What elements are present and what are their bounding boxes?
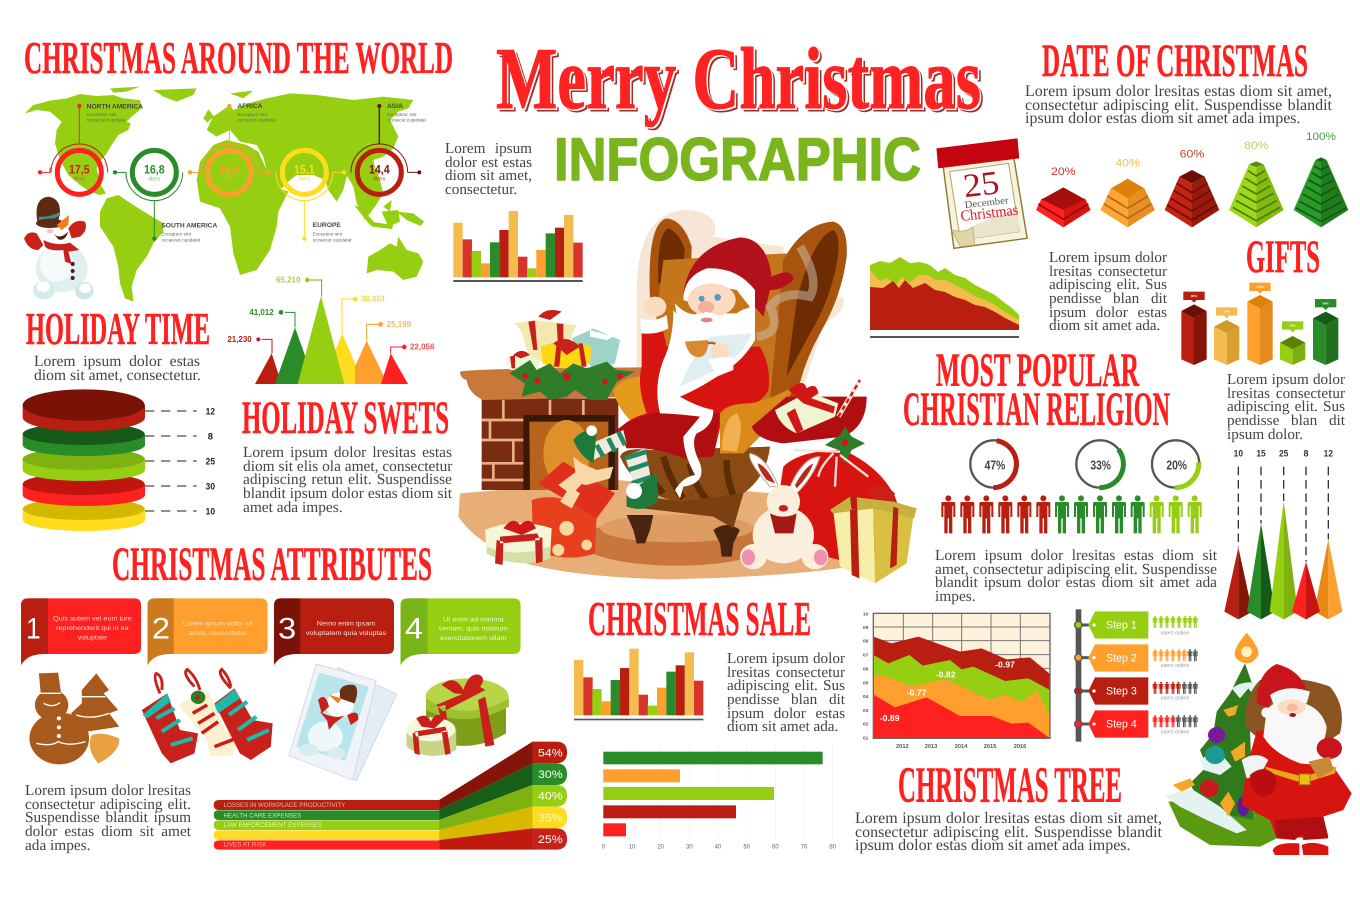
peak chart: holiday time values — [227, 276, 435, 384]
funnel chart: cost categories: LOSSES IN WORKPLACE PRODUCTIVITY — [224, 802, 346, 809]
world map with five litre rings: NORTH AMERICA — [87, 103, 143, 110]
card 3: Nemo enim ipsam — [317, 621, 376, 628]
area chart: yearly values: 2015 — [984, 744, 996, 750]
step 1: Step 1 — [1106, 620, 1137, 632]
illustration: santa with christmas tree — [1165, 633, 1352, 855]
world map with five litre rings: Excepteur sint — [387, 112, 417, 117]
title: merry christmas: Merry Christmas — [499, 34, 984, 131]
card 1: voluptate — [78, 635, 107, 641]
area chart: yearly values: 02 — [863, 722, 869, 728]
area chart: yearly values: 04 — [863, 694, 869, 700]
text block: beside gifts: lresitas consectetur — [1049, 263, 1167, 280]
isometric bar chart: gifts: 100% — [1256, 285, 1264, 289]
horizontal bar chart: 20 — [657, 845, 665, 851]
text block: gifts: pendisse blan dit — [1227, 412, 1345, 429]
bar chart: top centre — [453, 211, 583, 282]
funnel chart: cost categories: 35% — [538, 811, 563, 824]
world map with five litre rings: EUROPE — [313, 222, 341, 229]
icon: gingerbread cookies — [29, 673, 120, 764]
world map with five litre rings: occaecat cupidatat — [313, 238, 352, 243]
text block: christmas tree — [855, 810, 1162, 854]
area chart: yearly values: 05 — [863, 680, 869, 686]
sack with gift and holly — [752, 380, 910, 560]
text block: date of christmas: consectetur adipiscing elit. Suspendisse blandit — [1025, 97, 1332, 114]
area chart: yearly values: 2013 — [925, 744, 937, 750]
step 2: Step 2 — [1106, 652, 1137, 664]
heading: christmas around the world: CHRISTMAS AROUND THE WORLD — [24, 32, 453, 83]
spike chart: right column: 15 — [1256, 449, 1266, 459]
area chart: yearly values: 06 — [863, 666, 869, 672]
card 2: 2 — [152, 612, 170, 645]
card 3: voluptatem quia voluptas — [306, 630, 387, 637]
card 2: amet, consectetur — [189, 630, 247, 637]
horizontal bar chart: 0 — [602, 845, 606, 851]
peak chart: holiday time values: 41,012 — [249, 308, 274, 317]
donut charts and people row — [941, 440, 1202, 533]
peak chart: holiday time values: 21,230 — [227, 335, 252, 344]
step 4: users online — [1161, 729, 1189, 735]
area chart: yearly values: -0.77 — [907, 688, 927, 698]
text block: holiday swets: blandit ipsum dolor estas diom sit — [243, 485, 452, 502]
text block: holiday swets: adipiscing retun elit. Suspendisse — [243, 471, 452, 488]
spike chart: right column: 8 — [1303, 449, 1308, 459]
step 4 — [1075, 710, 1198, 738]
text block: most popular religion: blandit ipsum dolor estas diom sit amet ada — [935, 574, 1217, 591]
text block: gifts: Lorem ipsum dolor — [1227, 371, 1345, 388]
gold gift box — [830, 486, 917, 583]
bar chart: christmas sale — [574, 649, 703, 720]
floor gifts — [485, 457, 615, 565]
text block: gifts: lresitas consectetur — [1227, 385, 1345, 402]
horizontal bar chart: 70 — [801, 845, 808, 851]
text block: christmas sale — [727, 650, 845, 735]
area chart: yearly values: -0.97 — [995, 660, 1015, 670]
heading: holiday time: HOLIDAY TIME — [26, 303, 210, 354]
calendar: 25 december christmas: 25 — [961, 164, 1001, 205]
area chart: yearly values: 2016 — [1014, 744, 1026, 750]
card 3 — [274, 598, 394, 665]
text block: christmas sale: pendisse blan dit — [727, 691, 845, 708]
text block: christmas sale: ipsum dolor estas — [727, 705, 845, 722]
ring: europe 15,1: litres — [298, 177, 310, 183]
card 1: Quis autem vel eum iure — [53, 616, 132, 623]
area chart: top right — [870, 257, 1019, 338]
area chart: yearly values: 08 — [863, 639, 869, 645]
funnel chart: cost categories: LIVES AT RISK — [224, 842, 267, 849]
card 4 — [401, 598, 521, 665]
text block: date of christmas — [1025, 83, 1332, 127]
bunny toy — [740, 453, 828, 569]
title: merry christmas: Merry Christmas — [496, 31, 981, 128]
text block: gifts: adipiscing elit. Sus — [1227, 398, 1345, 415]
area chart: yearly values: 2012 — [896, 744, 909, 750]
area chart: yearly values: -0.82 — [936, 670, 956, 680]
world map with five litre rings: occaecat cupidatat — [161, 238, 201, 243]
area chart: yearly values: 2014 — [955, 744, 968, 750]
text block: date of christmas: Lorem ipsum dolor lresitas estas diom sit amet, — [1025, 83, 1332, 100]
armchair — [613, 218, 847, 557]
isometric bar chart: gifts: 60% — [1323, 301, 1329, 305]
text block: beside gifts: Lorem ipsum dolor — [1049, 249, 1167, 266]
heading: most popular christian religion — [903, 344, 1170, 436]
mantel gifts and holly — [505, 310, 635, 400]
card 4: 4 — [405, 612, 423, 645]
text block: top centre: dolor est estas — [445, 154, 532, 171]
stacked discs chart: 8 — [208, 431, 213, 441]
isometric bar chart: gifts: 25% — [1290, 324, 1296, 328]
text block: holiday time — [34, 353, 201, 384]
text block: beside gifts: ipsum dolor estas — [1049, 304, 1167, 321]
world map with five litre rings: Excepteur sint — [161, 232, 192, 237]
area chart: yearly values: 03 — [863, 708, 869, 714]
funnel chart: cost categories: 40% — [538, 789, 563, 803]
artwork layer with all headings, charts and illustrations: CHRISTMAS TREE — [898, 758, 1122, 814]
calendar: 25 december christmas: December — [964, 195, 1010, 211]
ring: north america 17,5: 17,5 — [69, 163, 90, 177]
text block: most popular religion: impes. — [935, 588, 976, 605]
calendar: 25 december christmas: Christmas — [960, 202, 1019, 225]
ring: asia 14,4: 14,4 — [369, 163, 390, 177]
pyramid chart: 20 to 100 percent: 40% — [1115, 157, 1140, 169]
text block: beside gifts: adipiscing elit. Sus — [1049, 276, 1167, 293]
text block: beside gifts: diom sit amet ada. — [1049, 317, 1160, 334]
world map with five litre rings: occaecat cupidatat — [237, 118, 277, 123]
text block: christmas attributes: consectetur adipiscing elit. — [25, 796, 191, 813]
donut charts and people row: 33% — [1090, 458, 1111, 472]
pyramid chart: 20 to 100 percent: 100% — [1306, 131, 1336, 143]
world map with five litre rings: ASIA — [387, 103, 403, 110]
pyramid chart: 20 to 100 percent: 60% — [1180, 149, 1204, 161]
area chart: yearly values: 01 — [863, 735, 869, 741]
text block: christmas sale: diom sit amet ada. — [727, 718, 838, 735]
peak chart: holiday time values: 38,601 — [361, 295, 386, 304]
world map with five litre rings: SOUTH AMERICA — [161, 223, 217, 230]
heading: holiday swets: HOLIDAY SWETS — [242, 392, 449, 444]
step 3: Step 3 — [1106, 686, 1137, 698]
stacked discs chart: 10 — [206, 506, 215, 516]
horizontal bar chart — [602, 743, 837, 851]
ring: europe 15,1: 15,1 — [294, 163, 315, 177]
horizontal bar chart: 10 — [629, 845, 636, 851]
horizontal bar chart: 30 — [686, 845, 693, 851]
horizontal bar chart: 80 — [829, 845, 837, 851]
ring: europe 15,1 — [276, 150, 346, 241]
text block: top centre: consectetur. — [445, 181, 517, 198]
card 1: 1 — [26, 612, 41, 645]
calendar: 25 december christmas — [936, 138, 1027, 248]
pyramid chart: 20 to 100 percent — [1036, 131, 1348, 227]
text block: top centre — [445, 140, 532, 198]
card 1: reprehenderit qui in ea — [56, 625, 129, 632]
card 3: 3 — [278, 612, 296, 645]
step 3: users online — [1161, 696, 1189, 702]
funnel chart: cost categories: 25% — [538, 832, 563, 846]
peak chart: holiday time values: 25,199 — [387, 320, 412, 329]
text block: holiday swets: amet ada impes. — [243, 499, 343, 516]
card 1 — [21, 598, 141, 665]
peak chart: holiday time values: 65,210 — [276, 276, 301, 285]
step 1 — [1075, 611, 1198, 639]
text block: holiday time: diom sit amet, consectetur. — [34, 367, 201, 384]
text block: beside gifts: pendisse blan dit — [1049, 290, 1167, 307]
text block: christmas sale: Lorem ipsum dolor — [727, 650, 845, 667]
horizontal bar chart: 50 — [743, 845, 751, 851]
illustration: santa in armchair by the fireplace — [458, 210, 917, 583]
isometric bar chart: gifts: 80% — [1191, 294, 1197, 298]
ring: south america 16,8: 16,8 — [144, 163, 165, 177]
text block: most popular religion: Lorem ipsum dolor lresitas estas diom sit — [935, 547, 1217, 564]
world map with five litre rings: AFRICA — [237, 103, 263, 110]
step 2 — [1075, 644, 1198, 672]
ring: asia 14,4: litres — [373, 177, 385, 183]
world map with five litre rings: occaecat cupidatat — [87, 118, 127, 123]
funnel chart: cost categories — [214, 742, 567, 850]
world map with five litre rings: Excepteur sint — [313, 232, 343, 237]
steps timeline with users online — [1075, 609, 1198, 742]
spike chart: right column: 25 — [1279, 449, 1288, 459]
area chart: yearly values — [863, 611, 1050, 750]
world map with five litre rings — [24, 87, 427, 302]
card 4: Ut enim ad minima — [443, 617, 504, 623]
text block: christmas attributes: Lorem ipsum dolor lresitas — [25, 782, 191, 799]
ring: south america 16,8: litres — [148, 177, 160, 183]
text block: christmas sale: lresitas consectetur — [727, 664, 845, 681]
ring: africa 15,4: 15,4 — [219, 163, 240, 177]
text block: most popular religion: amet, consectetur adipiscing elit. Suspendisse — [935, 561, 1217, 578]
area chart: yearly values: 10 — [863, 611, 869, 617]
icon: snowman — [24, 197, 94, 299]
stacked discs chart: 12 — [206, 406, 215, 416]
text block: beside gifts — [1049, 249, 1167, 334]
peak chart: holiday time values: 22,056 — [410, 343, 435, 352]
text block: gifts — [1227, 371, 1345, 443]
pyramid chart: 20 to 100 percent: 20% — [1051, 166, 1076, 178]
area chart: yearly values: 09 — [863, 625, 869, 631]
spike chart: right column — [1224, 449, 1342, 619]
icon: snowman photo cards — [289, 664, 397, 781]
world map with five litre rings: Excepteur sint — [87, 112, 117, 117]
ring: north america 17,5: litres — [73, 177, 85, 183]
funnel chart: cost categories: 30% — [538, 767, 563, 781]
text block: christmas attributes — [25, 782, 191, 854]
card 4: exercitationem ullam — [440, 635, 507, 642]
stacked discs chart — [23, 389, 215, 531]
heading: christmas attributes: CHRISTMAS ATTRIBUTES — [112, 538, 432, 591]
text block: date of christmas: ipsum dolor estas diom sit amet ada impes. — [1025, 110, 1301, 127]
icon: gift boxes — [406, 674, 509, 756]
funnel chart: cost categories: 54% — [538, 746, 563, 759]
text block: top centre: Lorem ipsum — [445, 140, 532, 157]
card 2: Lorem ipsum dolor sit — [183, 621, 253, 628]
icon: christmas stockings — [142, 669, 273, 763]
donut charts and people row: 47% — [985, 458, 1005, 472]
text block: christmas attributes: dolor estas diom sit amet — [25, 823, 191, 840]
isometric bar chart: gifts: 55% — [1224, 310, 1230, 314]
step 3 — [1075, 677, 1198, 705]
text block: holiday swets — [243, 444, 452, 516]
text block: christmas tree: Lorem ipsum dolor lresitas estas diom sit amet, — [855, 810, 1162, 827]
ring: asia 14,4 — [351, 104, 421, 194]
funnel chart: cost categories: LAW ENFORCEMENT EXPENSES — [224, 822, 322, 829]
fireplace — [460, 367, 642, 490]
santa figure — [573, 237, 813, 509]
funnel chart: cost categories: IMPAIRED DRIVING COSTS — [224, 832, 305, 839]
step 1: users online — [1161, 630, 1189, 636]
spike chart: right column: 12 — [1324, 449, 1333, 459]
step 2: users online — [1161, 663, 1189, 669]
text block: holiday swets: diom sit elis ola amet, consectetur — [243, 458, 452, 475]
isometric bar chart: gifts — [1181, 283, 1338, 365]
world map with five litre rings: Excepteur sint — [237, 112, 268, 117]
card 2 — [148, 598, 268, 665]
text block: christmas attributes: Suspendisse blandit ipsum — [25, 809, 191, 826]
text block: christmas tree: ipsum dolor estas diom sit amet ada impes. — [855, 837, 1131, 854]
attribute cards one to four — [21, 598, 567, 850]
text block: holiday time: Lorem ipsum dolor estas — [34, 353, 200, 370]
ring: south america 16,8 — [113, 150, 183, 241]
subtitle: infographic: INFOGRAPHIC — [554, 126, 921, 193]
step 4: Step 4 — [1106, 719, 1137, 731]
text block: christmas tree: consectetur adipiscing elit. Suspendisse blandit — [855, 824, 1162, 841]
horizontal bar chart: 60 — [772, 845, 779, 851]
area chart: yearly values: 07 — [863, 653, 869, 659]
ring: africa 15,4: litres — [223, 177, 235, 183]
spike chart: right column: 10 — [1234, 449, 1243, 459]
ring: africa 15,4 — [188, 104, 271, 194]
funnel chart: cost categories: HEALTH CARE EXPENSES — [224, 813, 302, 819]
heading: christmas sale: CHRISTMAS SALE — [588, 591, 811, 646]
text block: most popular religion — [935, 547, 1217, 605]
text block: christmas attributes: ada impes. — [25, 837, 90, 854]
title: merry christmas: Merry Christmas — [498, 32, 982, 130]
donut charts and people row: 20% — [1166, 458, 1187, 472]
area chart: yearly values: -0.89 — [880, 713, 900, 723]
stacked discs chart: 25 — [206, 456, 215, 466]
text block: holiday swets: Lorem ipsum dolor lresitas estas — [243, 444, 452, 461]
stacked discs chart: 30 — [206, 481, 215, 491]
text block: top centre: diom sit amet, — [445, 167, 532, 184]
heading: most popular christian religion: MOST POPULAR — [936, 344, 1140, 397]
text block: gifts: ipsum dolor. — [1227, 426, 1303, 443]
card 4: veniam, quis nostrum — [439, 626, 508, 633]
text block: christmas sale: adipiscing elit. Sus — [727, 677, 845, 694]
pyramid chart: 20 to 100 percent: 80% — [1244, 140, 1269, 152]
horizontal bar chart: 40 — [715, 845, 722, 851]
ring: north america 17,5 — [38, 104, 108, 194]
world map with five litre rings: occaecat cupidatat — [387, 118, 427, 123]
